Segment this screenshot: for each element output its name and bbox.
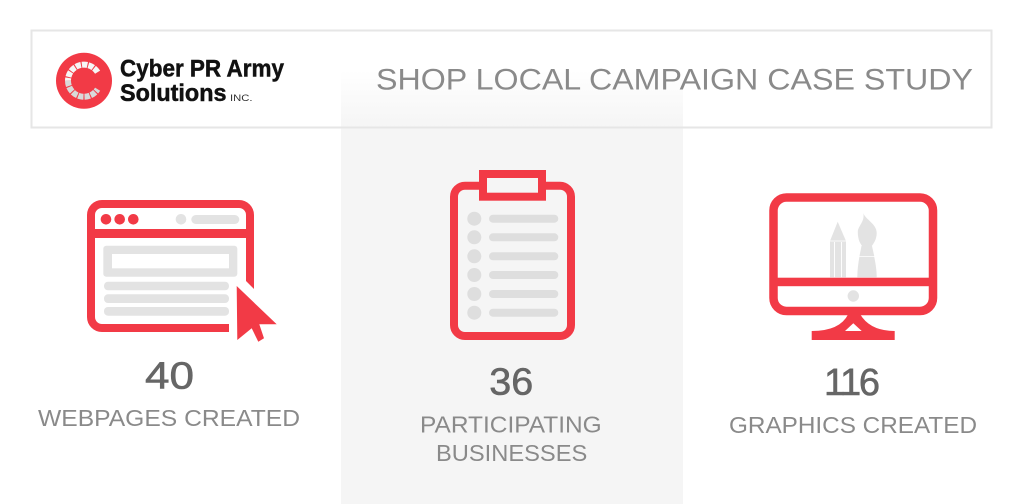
- stat: graphics created: [729, 362, 977, 438]
- stat: participating businesses: 36: [489, 361, 533, 403]
- panel: shaded centre column: [341, 70, 683, 504]
- icon: pencil: [830, 222, 846, 277]
- panel: header box: [32, 30, 992, 128]
- stat: participating businesses: PARTICIPATING: [420, 411, 602, 437]
- logo wordmark: Cyber PR Army: [120, 56, 285, 83]
- logo wordmark: INC.: [230, 93, 252, 104]
- stat: graphics created: 116: [824, 362, 880, 404]
- logo wordmark: Solutions: [120, 80, 226, 107]
- title: SHOP LOCAL CAMPAIGN CASE STUDY: [376, 63, 973, 96]
- logo: [56, 53, 285, 109]
- stat: webpages created: 40: [145, 355, 194, 397]
- logo wordmark: [120, 56, 285, 107]
- stat: webpages created: WEBPAGES CREATED: [38, 405, 300, 431]
- stat: participating businesses: [420, 361, 602, 466]
- stat: webpages created: [38, 355, 300, 431]
- stat: graphics created: GRAPHICS CREATED: [729, 412, 977, 438]
- stat: participating businesses: BUSINESSES: [436, 440, 587, 466]
- icon: paintbrush: [857, 213, 877, 277]
- icon: browser window with cursor: [87, 204, 277, 345]
- icon: desktop monitor with pencil and brush: [770, 198, 936, 340]
- icon: logo circle: [56, 53, 112, 109]
- icon: clipboard checklist: [454, 174, 571, 336]
